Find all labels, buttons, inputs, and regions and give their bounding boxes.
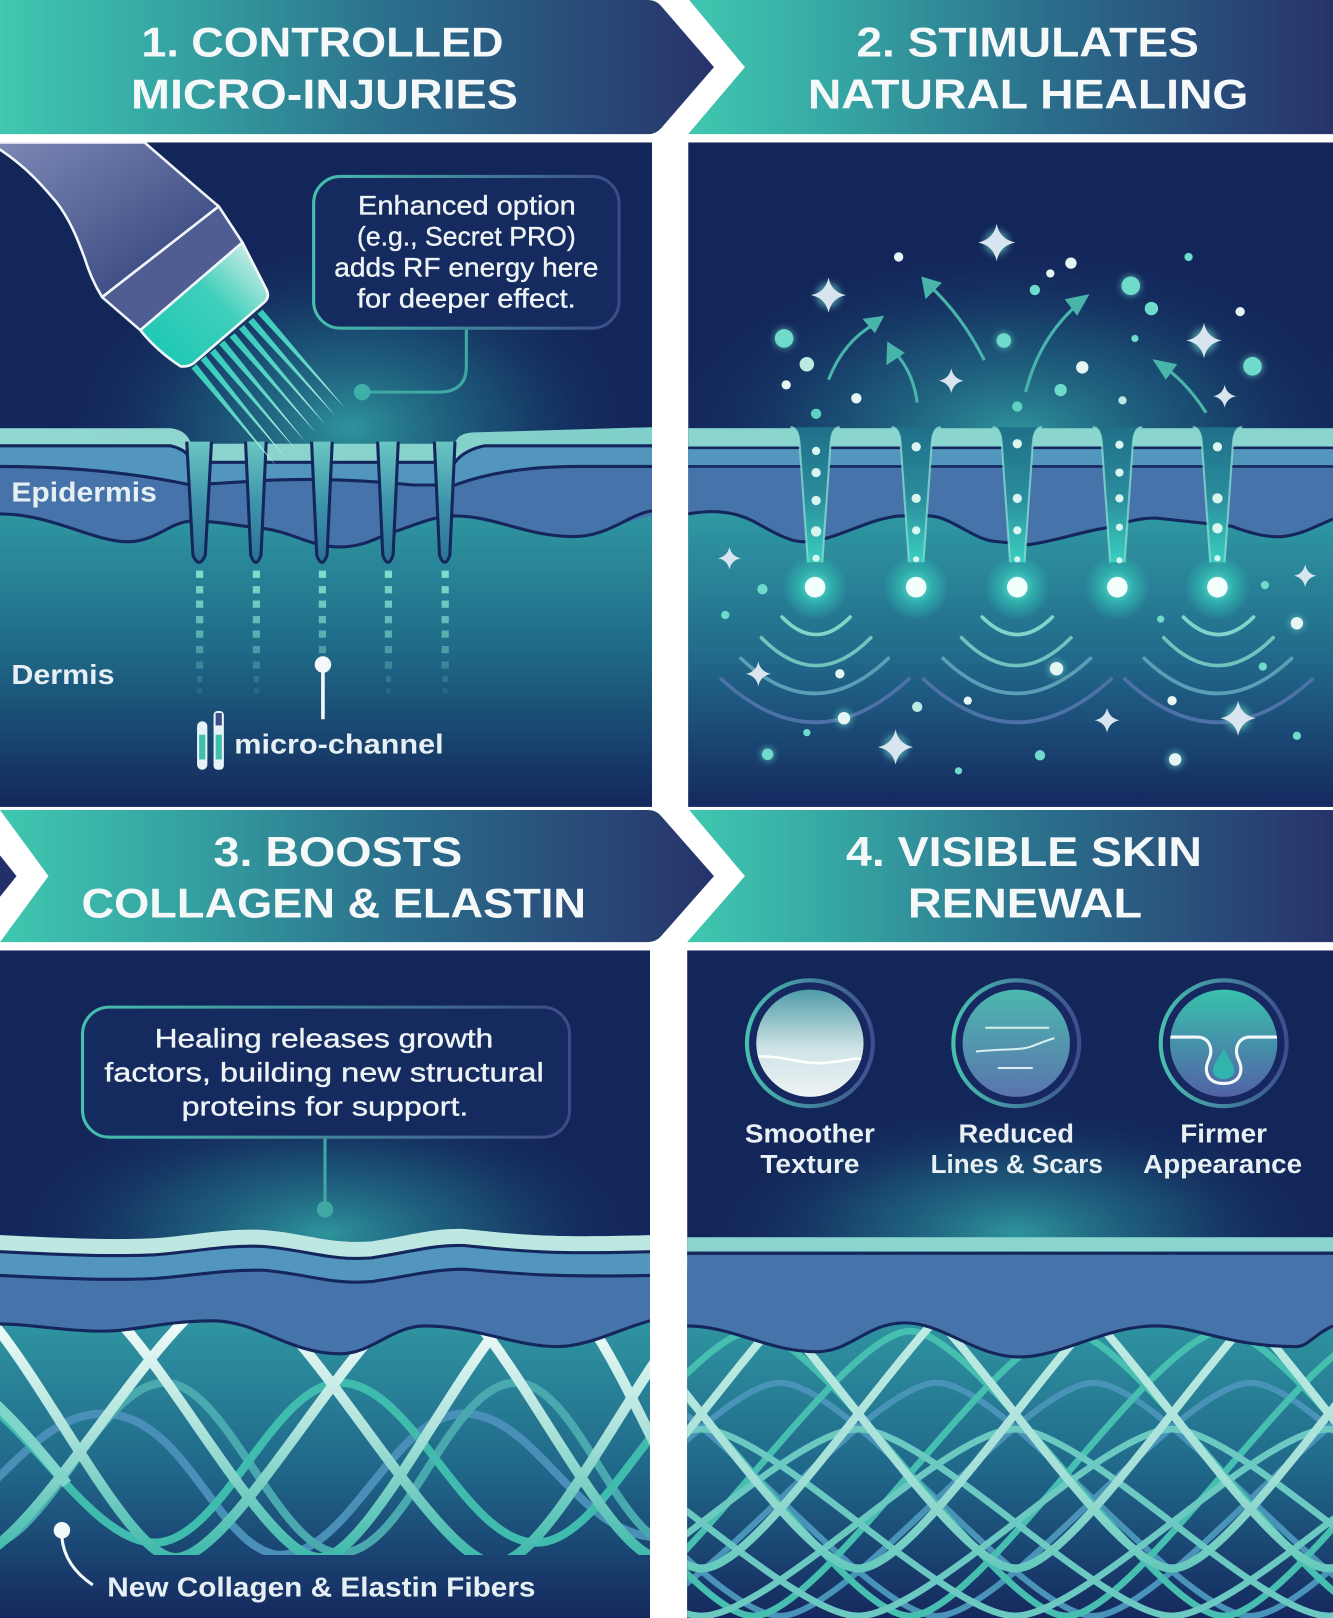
callout: healing growth factors bbox=[83, 1007, 570, 1218]
renewed fiber lattice bbox=[687, 1254, 1333, 1618]
label: dermis: Dermis bbox=[11, 659, 115, 690]
label: reduced lines and scars bbox=[931, 1120, 1103, 1179]
banner 1: 1. CONTROLLED bbox=[141, 20, 503, 66]
panel 1 illustration bbox=[0, 142, 652, 807]
icon: firmer appearance bbox=[1161, 980, 1287, 1106]
dermis layer 1 bbox=[0, 511, 652, 807]
icon: reduced lines and scars bbox=[953, 980, 1079, 1106]
healing wave arcs bbox=[721, 617, 1312, 722]
banner 3: 3. BOOSTS bbox=[214, 829, 462, 875]
epidermis layers 1 bbox=[0, 427, 652, 547]
callout: healing growth factors: Healing releases growth bbox=[155, 1023, 493, 1053]
particles: teal dots bbox=[721, 253, 1301, 774]
microneedling handpiece bbox=[0, 142, 268, 366]
rising arrows bbox=[828, 277, 1206, 413]
banner 2: 2. STIMULATES bbox=[856, 20, 1199, 66]
glowing healing points bbox=[785, 558, 1248, 618]
dashed depth lines bbox=[196, 571, 449, 693]
dermis layer 4 bbox=[687, 1310, 1333, 1618]
callout: enhanced option: for deeper effect. bbox=[357, 284, 576, 314]
banner 1: MICRO-INJURIES bbox=[131, 71, 518, 117]
particles: white dots bbox=[782, 252, 1303, 766]
label: epidermis: Epidermis bbox=[11, 476, 157, 507]
label: firmer appearance: Firmer bbox=[1180, 1120, 1267, 1148]
callout: healing growth factors: factors, building new structural bbox=[104, 1057, 544, 1087]
label: reduced lines and scars: Lines & Scars bbox=[931, 1151, 1103, 1179]
panel 4: visible skin renewal bbox=[687, 810, 1333, 1618]
label: micro-channel: micro-channel bbox=[234, 728, 444, 759]
icon: micro-channel tubes bbox=[197, 711, 224, 770]
label: smoother texture bbox=[745, 1120, 875, 1179]
label: reduced lines and scars: Reduced bbox=[958, 1120, 1074, 1148]
particles: sparkles bbox=[718, 224, 1316, 765]
label: firmer appearance: Appearance bbox=[1143, 1151, 1302, 1179]
dermis layer 2 bbox=[688, 512, 1333, 807]
icon: smoother texture bbox=[747, 980, 873, 1106]
collagen fibers 3 bbox=[0, 1323, 650, 1555]
soft particle glows bbox=[760, 230, 1304, 768]
micro-channel pointer bbox=[315, 656, 331, 719]
banner 4: 4. VISIBLE SKIN bbox=[846, 829, 1202, 875]
callout: healing growth factors: proteins for support. bbox=[182, 1091, 468, 1121]
panel 2: stimulates natural healing bbox=[645, 0, 1333, 807]
epidermis layers 2 bbox=[688, 428, 1333, 545]
panel 3: boosts collagen and elastin bbox=[0, 810, 743, 1618]
banner 3: COLLAGEN & ELASTIN bbox=[82, 880, 586, 926]
dermis layer 3 bbox=[0, 1310, 650, 1618]
pointer: new fibers bbox=[54, 1522, 93, 1585]
callout: enhanced option: (e.g., Secret PRO) bbox=[357, 222, 576, 252]
banner 4 bbox=[687, 810, 1333, 942]
label: new collagen and elastin fibers: New Collagen & Elastin Fibers bbox=[107, 1571, 535, 1602]
needle array bbox=[191, 310, 345, 466]
label: smoother texture: Smoother bbox=[745, 1120, 875, 1148]
dots rising in channels bbox=[811, 401, 1223, 563]
healing channels bbox=[790, 427, 1242, 562]
panel 4 illustration bbox=[687, 950, 1333, 1618]
panel 1: controlled micro-injuries bbox=[0, 0, 714, 807]
panel 2 illustration bbox=[645, 142, 1333, 807]
label: firmer appearance bbox=[1143, 1120, 1302, 1179]
callout: enhanced option bbox=[314, 176, 619, 400]
epidermis layers 4 bbox=[687, 1237, 1333, 1357]
callout: enhanced option: Enhanced option bbox=[358, 191, 576, 221]
banner 1 bbox=[0, 0, 714, 134]
banner 4: RENEWAL bbox=[908, 880, 1142, 926]
epidermis layers 3 bbox=[0, 1229, 650, 1354]
callout: enhanced option: adds RF energy here bbox=[334, 253, 598, 283]
banner 2 bbox=[688, 0, 1333, 134]
micro-injury channels bbox=[187, 442, 455, 562]
label: smoother texture: Texture bbox=[760, 1151, 859, 1179]
banner 3 bbox=[0, 810, 714, 942]
panel 3 illustration bbox=[0, 950, 650, 1618]
banner 2: NATURAL HEALING bbox=[808, 71, 1248, 117]
